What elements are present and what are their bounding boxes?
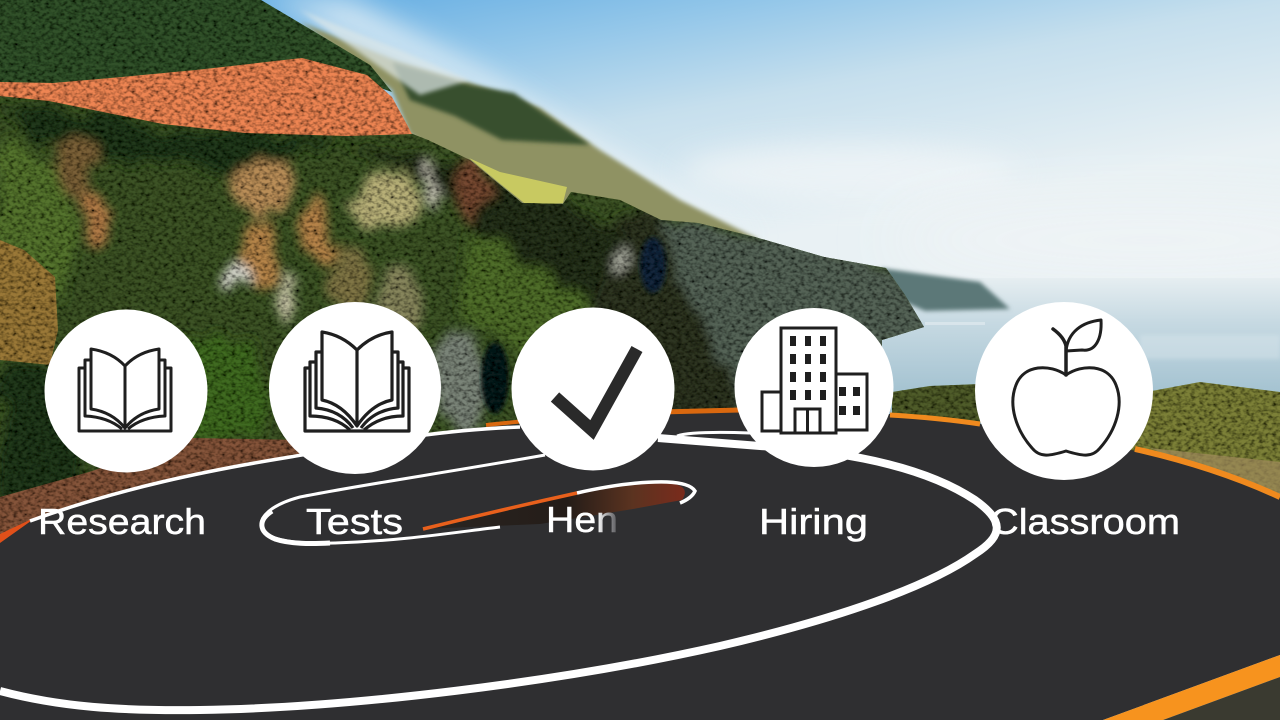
background: ocean [860, 278, 1280, 428]
hedge along the road edge [892, 382, 1280, 500]
icon circle: building [734, 308, 894, 467]
label: Hen [546, 499, 618, 540]
icon circle: thick book [269, 302, 441, 474]
icon: open book [79, 349, 171, 431]
bottom-right orange road edge [1103, 655, 1280, 720]
label: Tests [306, 501, 403, 542]
upper cliff top [0, 0, 392, 92]
step: Research [38, 310, 208, 542]
label: Hiring [759, 501, 868, 542]
icon: check mark [555, 349, 637, 430]
icon: apple [1013, 320, 1119, 455]
rocky boulder at the left edge [0, 240, 58, 365]
white road line: small upper loop [677, 432, 750, 436]
distant headland [880, 268, 1010, 311]
step: Classroom [975, 302, 1180, 542]
step: Hen (partly faded) [512, 308, 674, 540]
icon circle: open book [44, 310, 208, 472]
white road line: upper left curve [30, 427, 520, 521]
step: Tests [269, 302, 441, 542]
orange road edge lines [486, 410, 1280, 497]
label: Research [38, 501, 206, 542]
orange rock band [0, 58, 412, 136]
label: Classroom [990, 501, 1180, 542]
icon circle: apple [975, 302, 1153, 480]
icon: building [762, 328, 867, 433]
dark caves [481, 237, 666, 414]
pit in road: inner hairpin [261, 455, 695, 544]
icon: thick book [305, 332, 409, 431]
cliff rock patches and shadows [0, 100, 935, 510]
ground corner, bottom right [1163, 677, 1280, 720]
road surface [0, 410, 1280, 720]
white road line: outer curve [0, 438, 997, 710]
icon circle: check mark [512, 308, 674, 470]
distant green hills [300, 10, 760, 240]
background: sky [0, 0, 1280, 420]
brown road shoulder [0, 438, 320, 545]
left orange wedge [0, 516, 38, 543]
main cliff [0, 96, 924, 497]
step: Hiring [734, 308, 894, 542]
